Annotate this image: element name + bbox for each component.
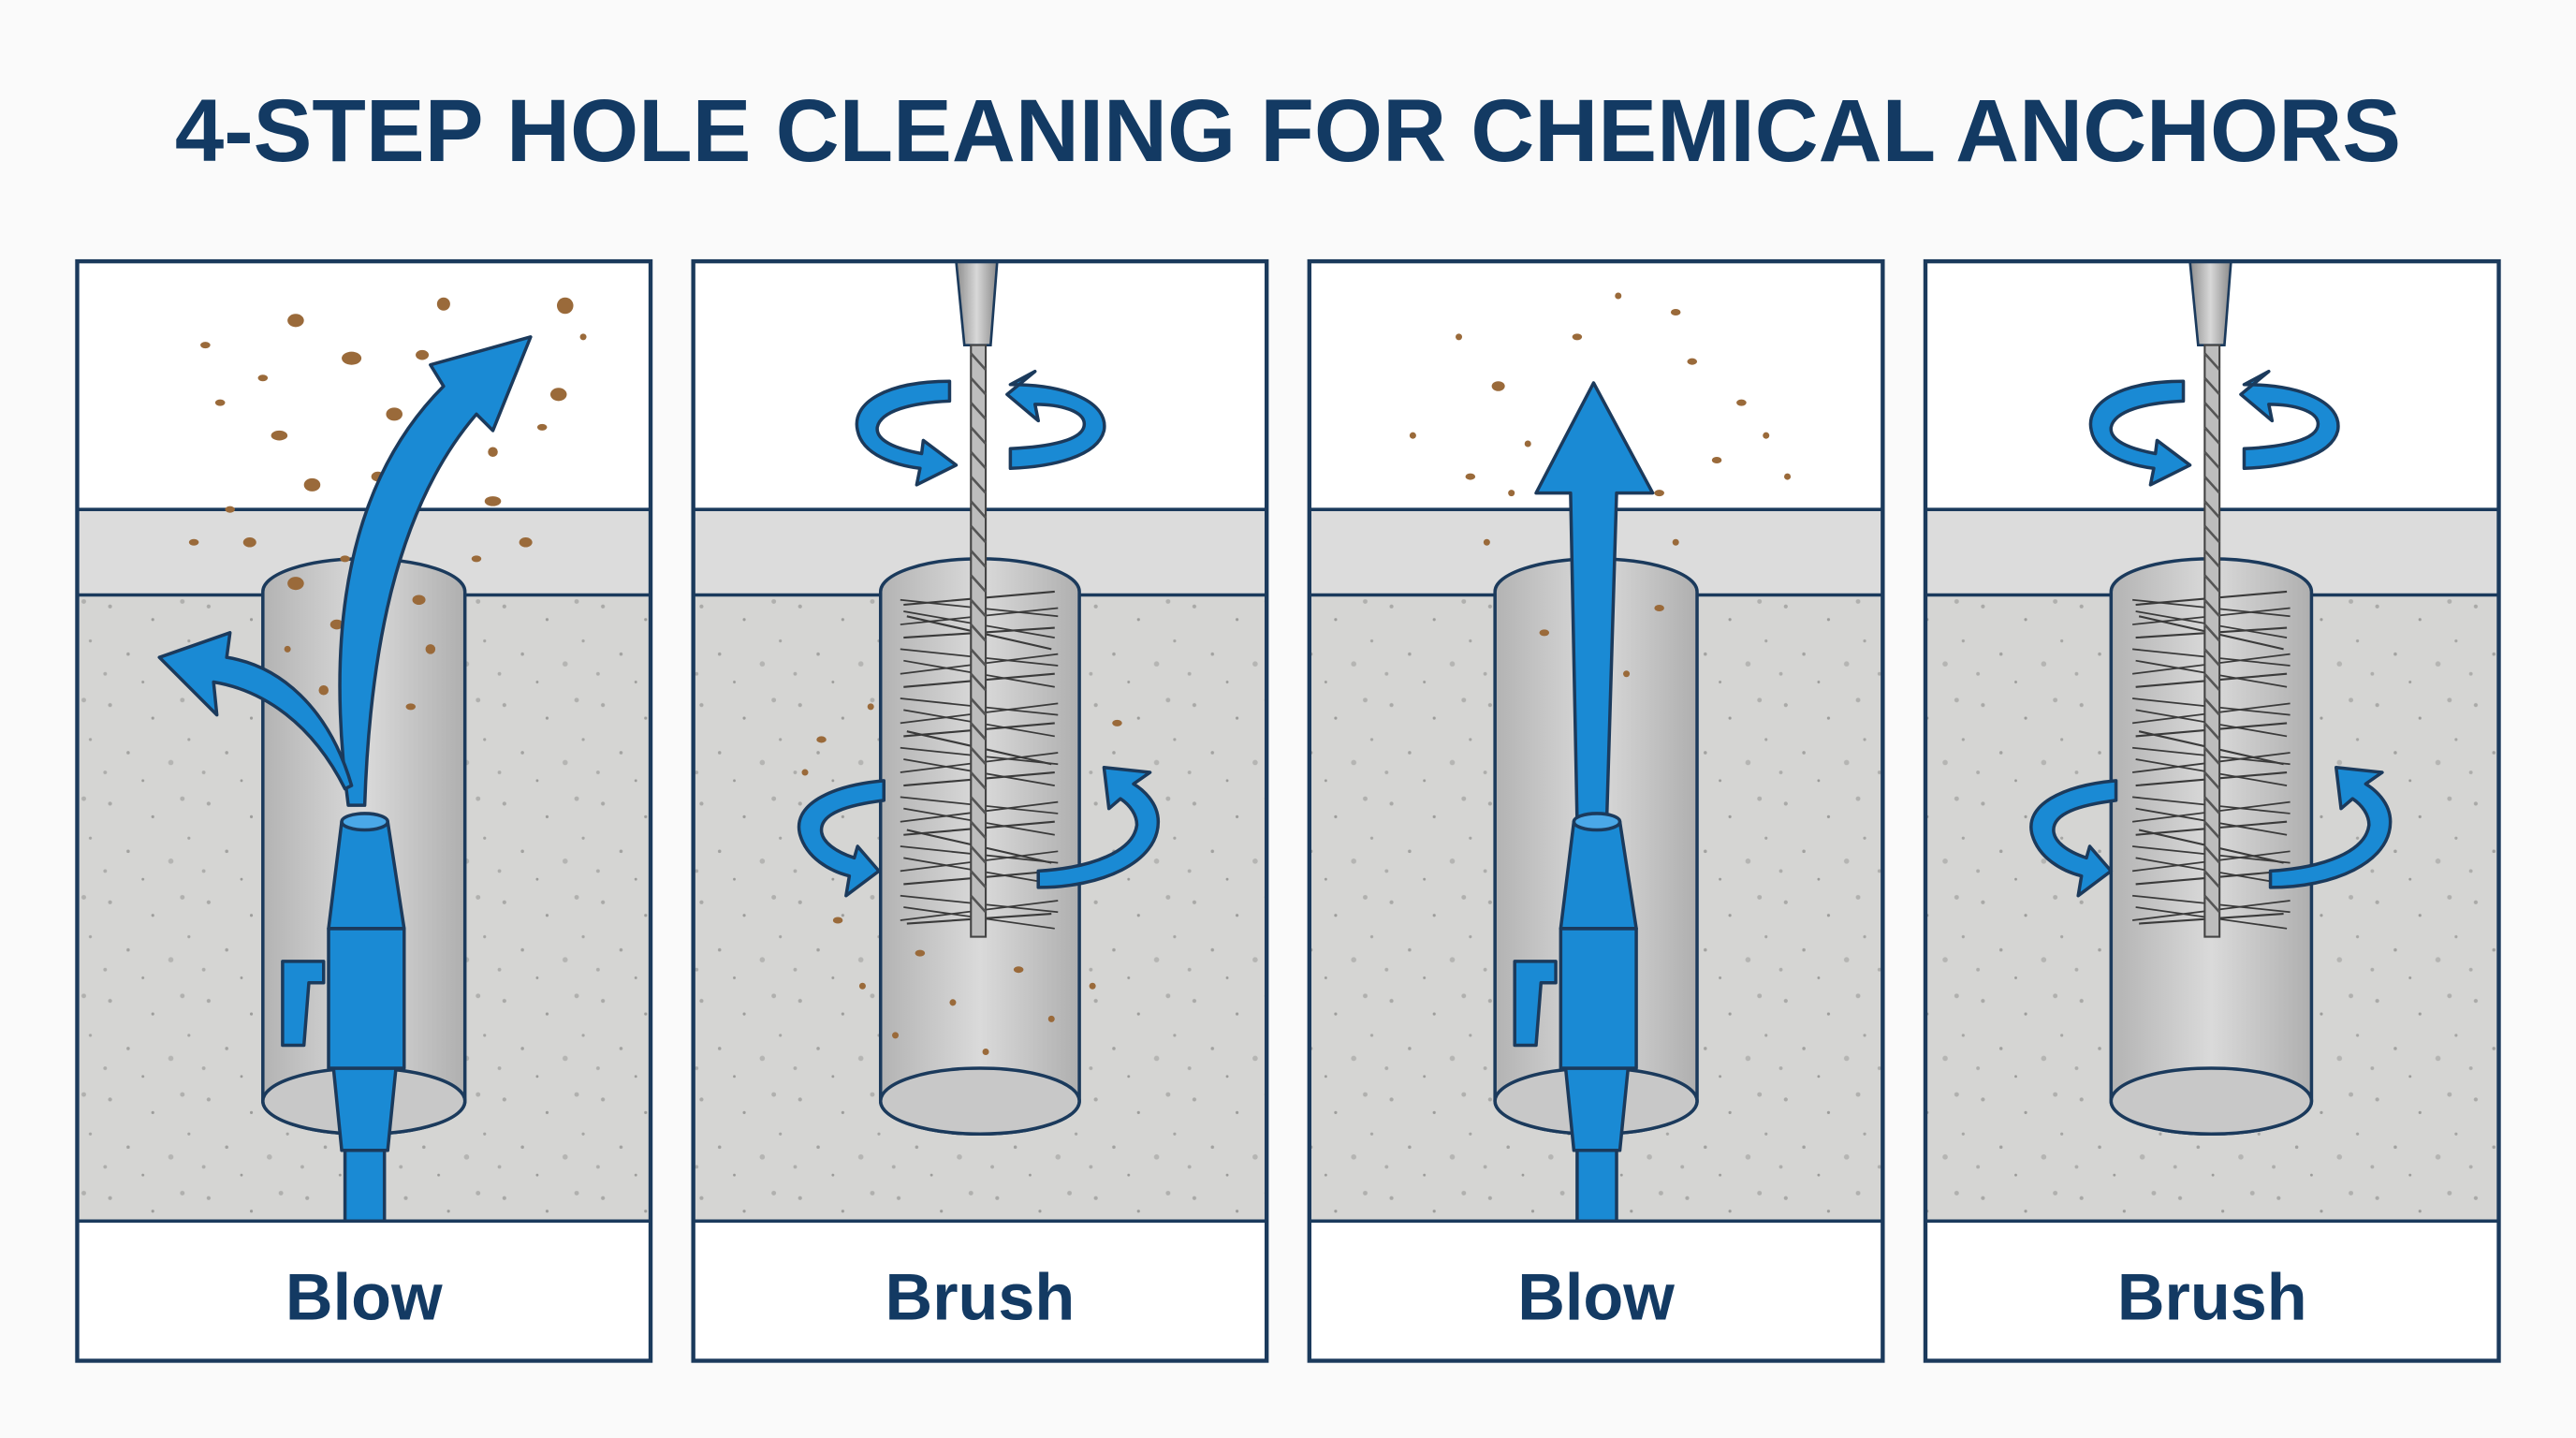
icon: air nozzle <box>1515 814 1636 1221</box>
panel: step 1 blow <box>77 261 651 1360</box>
dust particles <box>189 298 587 710</box>
arrow: rotation top <box>2090 372 2338 485</box>
panel: step 2 brush <box>694 261 1266 1360</box>
dust particles <box>801 703 1137 1055</box>
arrow: straight air flow <box>1536 383 1653 822</box>
hole <box>1495 559 1697 1134</box>
icon: brush with bristles <box>900 261 1058 937</box>
arrow: small curved air flow left <box>159 633 352 789</box>
arrow: big curved air flow <box>340 337 531 805</box>
icon: brush with bristles <box>2132 261 2291 937</box>
panel: step 4 brush <box>1925 261 2499 1360</box>
label: Brush: Brush <box>2117 1260 2307 1334</box>
label: Blow: Blow <box>1517 1260 1675 1334</box>
hole <box>263 559 465 1134</box>
panel: step 3 blow <box>1310 261 1882 1360</box>
hole <box>2111 559 2311 1134</box>
arrow: rotation bottom <box>799 768 1158 896</box>
label: Blow: Blow <box>285 1260 443 1334</box>
hole <box>881 559 1079 1134</box>
dust particles <box>1410 292 1791 677</box>
arrow: rotation top <box>856 372 1105 485</box>
arrow: rotation bottom <box>2031 768 2391 896</box>
icon: air nozzle <box>283 814 404 1221</box>
label: Brush: Brush <box>886 1260 1075 1334</box>
title: 4-STEP HOLE CLEANING FOR CHEMICAL ANCHORS <box>175 81 2401 181</box>
